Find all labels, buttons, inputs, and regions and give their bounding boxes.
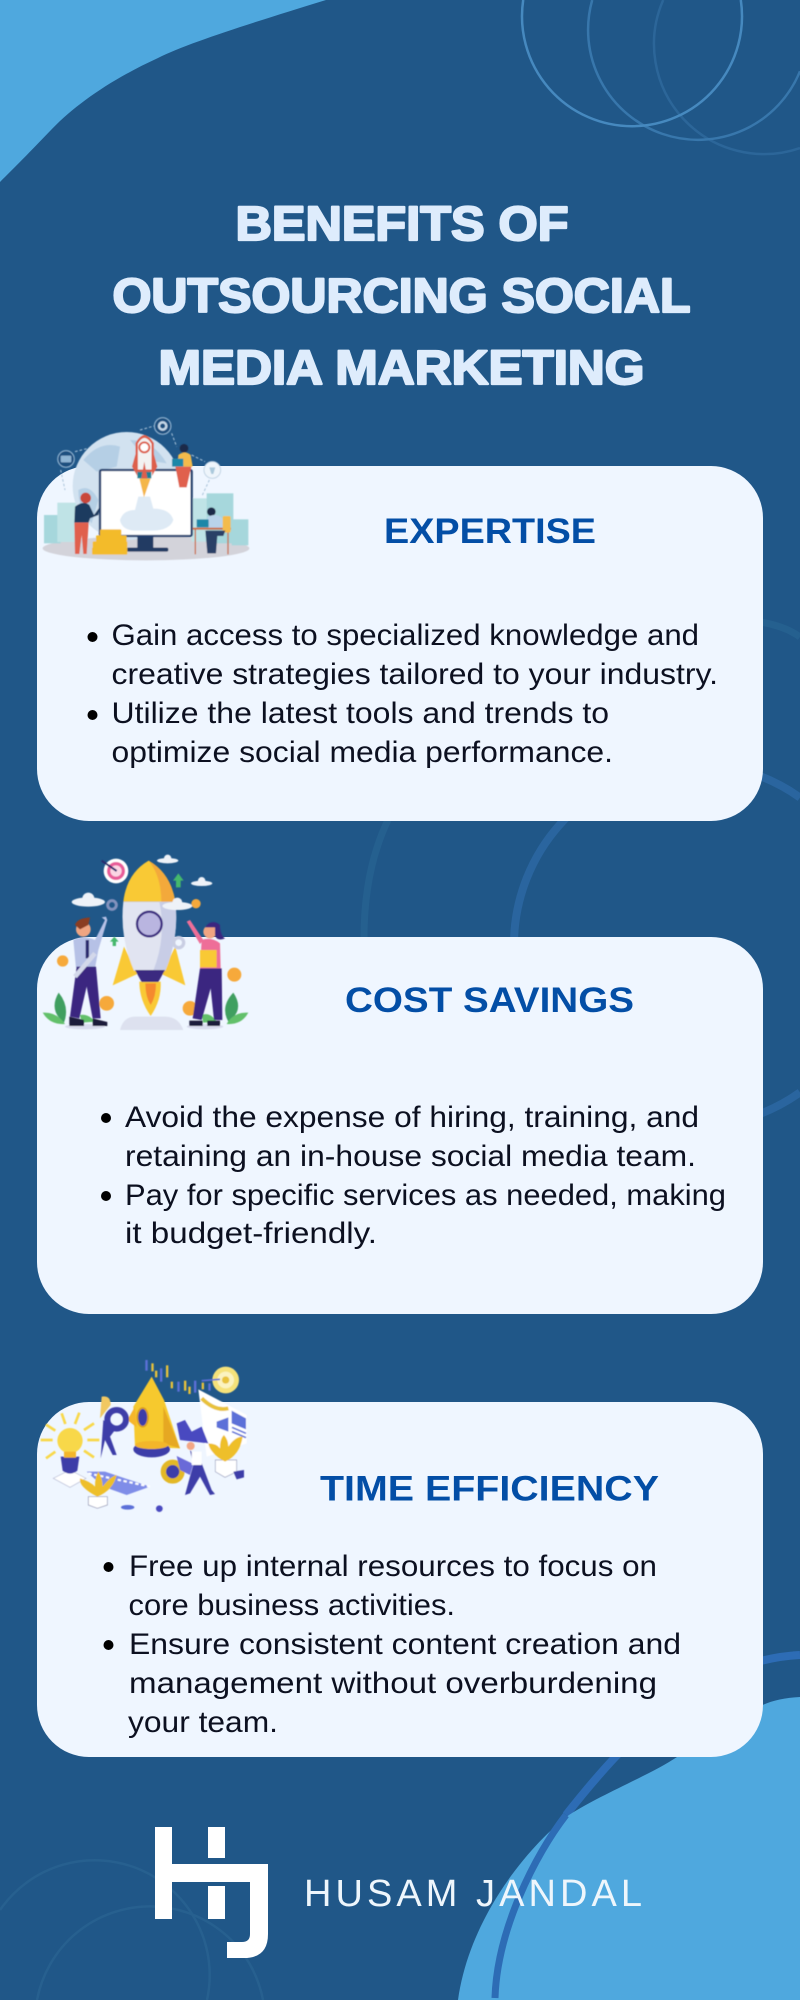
panel: expertise: [37, 418, 763, 821]
heading: COST SAVINGS: [345, 981, 634, 1020]
bullet list: Pay for specific services as needed, making: [125, 1179, 726, 1212]
title: MEDIA MARKETING: [158, 341, 644, 395]
title: OUTSOURCING SOCIAL: [112, 269, 690, 323]
icon: rocket launch on monitor with team: [43, 418, 249, 560]
bullet list: creative strategies tailored to your industry.: [112, 658, 718, 691]
bullet list: Avoid the expense of hiring, training, and: [125, 1101, 699, 1134]
panel: time efficiency: [37, 1360, 763, 1757]
bullet list: Utilize the latest tools and trends to: [112, 697, 609, 730]
bullet list: [88, 619, 718, 769]
icon: rocket with two people: [43, 855, 248, 1030]
background arcs behind cards: [364, 622, 800, 1126]
bottom-left faint circles: [0, 1860, 263, 2000]
icon: isometric rocket, gears and bulb: [41, 1360, 247, 1512]
bottom-right stripe arc behind blob: [566, 1655, 800, 1815]
bullet list: [101, 1101, 726, 1250]
panel: cost savings: [37, 855, 763, 1314]
heading: TIME EFFICIENCY: [320, 1470, 659, 1508]
bullet list: Gain access to specialized knowledge and: [112, 619, 699, 652]
top-right outline circles: [522, 0, 800, 154]
card background: [37, 466, 763, 821]
bottom-right light blue blob: [458, 1697, 800, 2000]
title: BENEFITS OF: [236, 197, 568, 251]
logo wordmark: HUSAM JANDAL: [304, 1873, 642, 1915]
bullet list: core business activities.: [128, 1589, 455, 1622]
heading: EXPERTISE: [384, 512, 596, 551]
title: [112, 197, 690, 395]
bullet list: Free up internal resources to focus on: [129, 1550, 657, 1583]
bullet list: retaining an in-house social media team.: [125, 1140, 696, 1173]
logo: HJ monogram: [155, 1827, 268, 1958]
card background: [37, 1402, 763, 1757]
card background: [37, 937, 763, 1314]
bullet list: [104, 1550, 681, 1739]
top-left light blue blob: [0, 0, 326, 182]
bullet list: Ensure consistent content creation and: [129, 1628, 681, 1661]
bullet list: management without overburdening: [129, 1667, 657, 1700]
bullet list: optimize social media performance.: [112, 736, 613, 769]
stripe over bottom blob: [495, 1815, 566, 1998]
bullet list: your team.: [128, 1706, 278, 1739]
bullet list: it budget-friendly.: [125, 1217, 377, 1250]
